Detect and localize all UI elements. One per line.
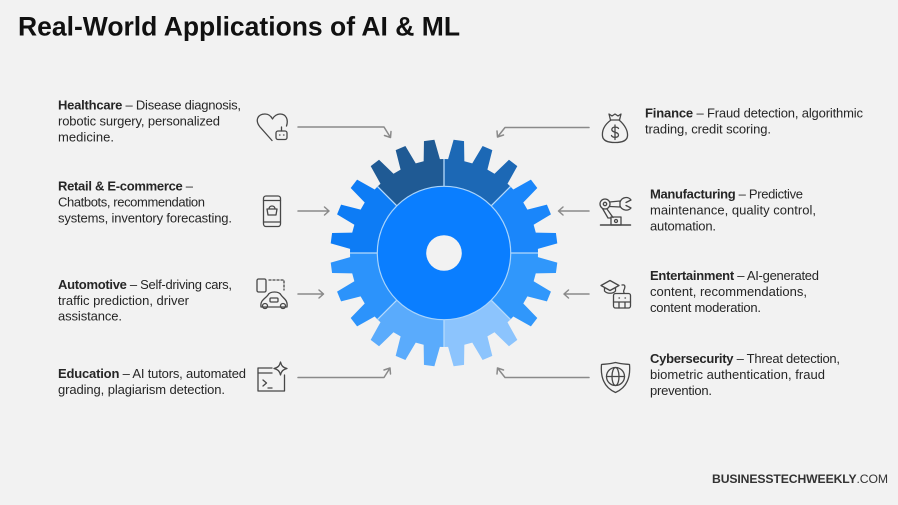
gear sector: bottom left xyxy=(371,300,444,366)
arrow: finance to gear xyxy=(497,128,589,137)
text block: healthcare xyxy=(58,98,241,144)
text block: retail and e-commerce: Chatbots, recommendation xyxy=(58,194,205,210)
gear hub xyxy=(377,186,511,320)
text block: healthcare: robotic surgery, personalized xyxy=(58,114,220,128)
text block: finance: trading, credit scoring. xyxy=(645,122,771,136)
gear sector: lower right xyxy=(491,253,557,326)
text block: automotive xyxy=(58,277,232,324)
arrow: retail to gear xyxy=(298,207,329,215)
text block: healthcare: medicine. xyxy=(58,130,114,144)
text block: entertainment: content moderation. xyxy=(650,300,761,315)
gear diagram xyxy=(312,121,576,385)
title: Real-World Applications of AI & ML xyxy=(18,12,460,42)
gear sector: top left xyxy=(364,121,462,220)
arrow: manufacturing to gear xyxy=(558,207,589,215)
icon: self-driving car xyxy=(257,279,287,308)
text block: manufacturing: automation. xyxy=(650,218,716,234)
gear sector: upper left xyxy=(331,180,397,253)
arrow: healthcare to gear xyxy=(298,127,391,138)
text block: retail and e-commerce xyxy=(58,178,232,226)
gear center hole xyxy=(426,235,462,271)
text block: finance xyxy=(645,106,864,136)
text block: cybersecurity: prevention. xyxy=(650,383,712,398)
gear sector: upper right xyxy=(477,173,576,271)
icon: shield with globe xyxy=(601,362,630,392)
arrow: entertainment to gear xyxy=(564,290,589,298)
text block: automotive: Automotive – Self-driving cars, xyxy=(58,277,232,292)
text block: retail and e-commerce: systems, inventory forecasting. xyxy=(58,210,232,226)
text block: entertainment: content, recommendations, xyxy=(650,284,807,299)
text block: entertainment xyxy=(650,268,819,315)
text block: automotive: traffic prediction, driver xyxy=(58,293,190,308)
footer brand: BUSINESSTECHWEEKLY.COM xyxy=(712,472,888,486)
text block: cybersecurity: biometric authentication, fraud xyxy=(650,367,825,382)
text block: retail and e-commerce: Retail & E-commerce – xyxy=(58,178,194,194)
gear sector: top right xyxy=(444,140,517,206)
text block: cybersecurity xyxy=(650,351,840,398)
icon: graduation cap and robot xyxy=(601,280,630,308)
gear sector: bottom right xyxy=(426,286,524,385)
text block: finance: Finance – Fraud detection, algorithmic xyxy=(645,106,864,120)
text block: cybersecurity: Cybersecurity – Threat detection, xyxy=(650,351,840,366)
text block: manufacturing: Manufacturing – Predictive xyxy=(650,186,803,202)
text block: entertainment: Entertainment – AI-generated xyxy=(650,268,819,283)
arrow: cybersecurity to gear xyxy=(497,368,589,378)
arrow: automotive to gear xyxy=(298,290,324,298)
icon: phone with shopping basket xyxy=(264,196,280,226)
text block: education: grading, plagiarism detection. xyxy=(58,382,225,397)
text block: healthcare: Healthcare – Disease diagnosis, xyxy=(58,98,241,112)
icon: money bag xyxy=(602,114,628,142)
text block: manufacturing xyxy=(650,186,816,234)
icon: robot arm xyxy=(600,198,631,225)
arrow: education to gear xyxy=(298,368,390,378)
text block: education: Education – AI tutors, automated xyxy=(58,366,246,381)
text block: manufacturing: maintenance, quality control, xyxy=(650,202,816,218)
icon: terminal with sparkle xyxy=(258,362,287,391)
icon: heart with robot xyxy=(257,114,287,140)
text block: automotive: assistance. xyxy=(58,308,122,324)
text block: education xyxy=(58,366,246,397)
gear sector: lower left xyxy=(312,235,411,333)
